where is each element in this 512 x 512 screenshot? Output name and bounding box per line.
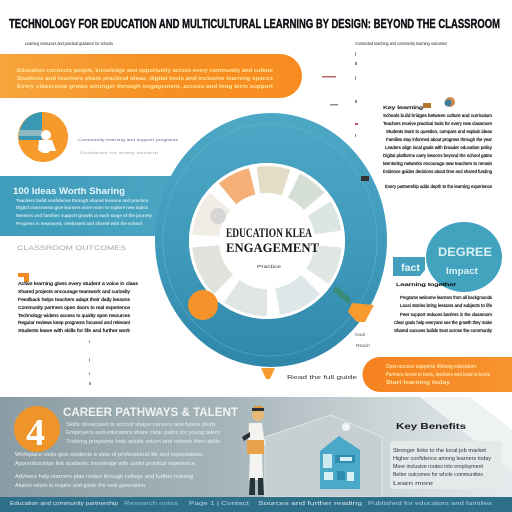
icon: grey dot: [210, 208, 226, 224]
badge: teal circle: DEGREE: [438, 245, 492, 259]
badge: teal circle: [426, 222, 502, 292]
banner: top orange: Every classroom grows stronger through engagement, access and long term support: [17, 84, 273, 90]
label under blue panel: CLASSROOM OUTCOMES: [17, 245, 127, 252]
card: right text: [390, 441, 502, 489]
text block top right: Schools build bridges between culture and curriculum: [383, 113, 492, 118]
text block lower right: Programs welcome learners from all backgrounds: [400, 295, 493, 300]
text block top right: Evidence guides decisions about time and shared funding: [383, 169, 492, 174]
note: below ring right: Goal: [355, 332, 365, 337]
banner: lower right orange: [362, 357, 512, 392]
centre title: [226, 225, 319, 255]
icon: orange number circle: 4: [26, 412, 45, 454]
icon: person: [242, 406, 265, 495]
icon: teal house: [320, 436, 360, 489]
banner: top orange: [0, 54, 302, 98]
text block lower right: Shared success builds trust across the community: [394, 328, 493, 333]
tag: small teal: fact: [401, 263, 421, 274]
text block top right: Key learning: [383, 105, 424, 110]
panel body top: Skills developed in school shape careers and future study: [66, 422, 217, 428]
card: right text: More inclusive routes into employment: [393, 464, 484, 470]
banner: lower right orange: Open access supports lifelong education: [386, 364, 477, 370]
centre small label: Practice: [257, 264, 282, 269]
left text block: Technology widens access to quality open resources: [18, 313, 131, 318]
icon: white knob: [342, 423, 350, 431]
footer strip: Published for educators and families: [368, 501, 492, 507]
caption: beside icon: [78, 137, 178, 155]
wedges: [192, 166, 342, 316]
text block top right: Teachers receive practical tools for every new classroom: [383, 121, 492, 126]
left text block: Shared projects encourage teamwork and curiosity: [18, 289, 131, 294]
panel: blue left: Digital classrooms give learners more room to explore new topics: [16, 205, 148, 210]
panel: blue left: [0, 176, 176, 236]
panel heading: 100 Ideas Worth Sharing: [13, 186, 125, 196]
note: before orange pill: Read the full guide: [287, 375, 357, 381]
tag: small teal: [393, 257, 425, 276]
text block lower right: Local stories bring lessons and subjects to life: [400, 303, 492, 308]
marker: orange ball: [188, 290, 218, 320]
vertical note left: [89, 340, 91, 385]
icon: small flag: [18, 273, 29, 282]
panel body lower: [15, 452, 204, 489]
caption: beside icon: Guidance for every student: [80, 150, 159, 155]
footer strip: Education and community partnership: [10, 501, 118, 507]
left text block: Feedback helps teachers adapt their daily lessons: [18, 297, 131, 302]
left text block: Students leave with skills for life and further work: [18, 328, 131, 333]
panel: blue left: Mentors and families support growth at each stage of the journey: [16, 213, 152, 218]
text block top right: Leaders align local goals with broader education policy: [385, 145, 493, 150]
caption: beside icon: Community learning and support programs: [78, 137, 178, 142]
marker: orange notch right: [348, 303, 374, 322]
note: below ring right: Reach: [356, 343, 371, 348]
footer strip: Sources and further reading: [258, 501, 362, 507]
card: right text: Higher confidence among learners today: [393, 456, 492, 462]
marker: dark dot: [361, 176, 369, 181]
house outline: [265, 415, 382, 497]
panel body lower: Advisers help learners plan routes through college and further training: [15, 474, 193, 480]
ring: teal: [155, 113, 387, 367]
icon: small badge pair: [423, 97, 455, 108]
text block lower right: Learning together: [396, 282, 457, 287]
icon: orange number circle: [14, 406, 60, 454]
left text block: [18, 273, 139, 333]
text block top right: Students learn to question, compare and explain ideas: [386, 129, 493, 134]
panel body lower: Alumni return to inspire and guide the next generation: [15, 483, 145, 489]
text block top right: Digital platforms carry lessons beyond the school gates: [383, 153, 493, 158]
icon: person in split circle: [18, 112, 68, 162]
badge: teal circle: Impact: [446, 266, 478, 276]
text block lower right: [394, 282, 493, 333]
banner: lower right orange: Start learning today: [386, 380, 451, 386]
panel body top: Training programs help adults return and refresh their skills: [66, 439, 221, 445]
footer strip: Research notes: [124, 501, 178, 507]
panel body lower: Apprenticeships link academic knowledge with useful practical experience: [15, 461, 195, 467]
text block top right: [383, 97, 493, 189]
panel heading: CAREER PATHWAYS & TALENT: [63, 405, 239, 419]
subtitle left: Learning resources and practical guidance for schools: [25, 41, 114, 46]
right heading: Key Benefits: [396, 422, 467, 431]
panel body top: Employers and educators share clear paths for young talent: [66, 430, 221, 436]
text block lower right: Peer support reduces barriers in the classroom: [400, 312, 492, 317]
note: below ring right: [355, 332, 371, 348]
panel body top: [66, 422, 221, 445]
left text block: Community partners open doors to real experience: [18, 305, 130, 310]
footer strip: Page 1 | Contact: [189, 501, 250, 507]
marker: clip on ring: [333, 286, 351, 304]
marker: orange notch bottom: [261, 368, 275, 379]
text block top right: Every partnership adds depth to the learning experience: [385, 184, 492, 189]
footer strip: [0, 497, 512, 512]
card: right text: Stronger links to the local job market: [393, 448, 487, 454]
centre disc: [189, 163, 345, 319]
left text block: Active learning gives every student a voice in class: [18, 281, 139, 286]
text block lower right: Clear goals help everyone see the growth they make: [394, 320, 492, 325]
centre title: EDUCATION KLEA: [226, 225, 312, 240]
panel: blue left: Progress is measured, celebrated and shared with the school: [16, 221, 142, 226]
subtitle right: Connected teaching and community learning outcomes: [355, 41, 448, 46]
card: right text: Better outcomes for whole communities: [393, 472, 484, 478]
banner: top orange: Education connects people, knowledge and opportunity across every community and culture: [17, 68, 273, 74]
text block top right: Mentoring networks encourage new teachers to remain: [383, 161, 492, 166]
panel: gray bottom: [0, 397, 512, 512]
left text block: Regular reviews keep programs focused and relevant: [18, 320, 131, 325]
banner: top orange: Students and teachers share practical ideas, digital tools and inclusive learning spaces: [17, 76, 273, 82]
text block top right: Families stay informed about progress through the year: [386, 137, 492, 142]
ring thin line: [163, 124, 377, 356]
connector notes top right: [322, 52, 358, 137]
ring diagram: [155, 113, 387, 379]
centre title: ENGAGEMENT: [226, 240, 319, 255]
card: right text: Learn more: [393, 481, 433, 487]
panel body lower: Workplace visits give students a view of professional life and expectations: [15, 452, 204, 458]
panel: blue left: Teachers build confidence through shared lessons and practice: [16, 198, 148, 203]
